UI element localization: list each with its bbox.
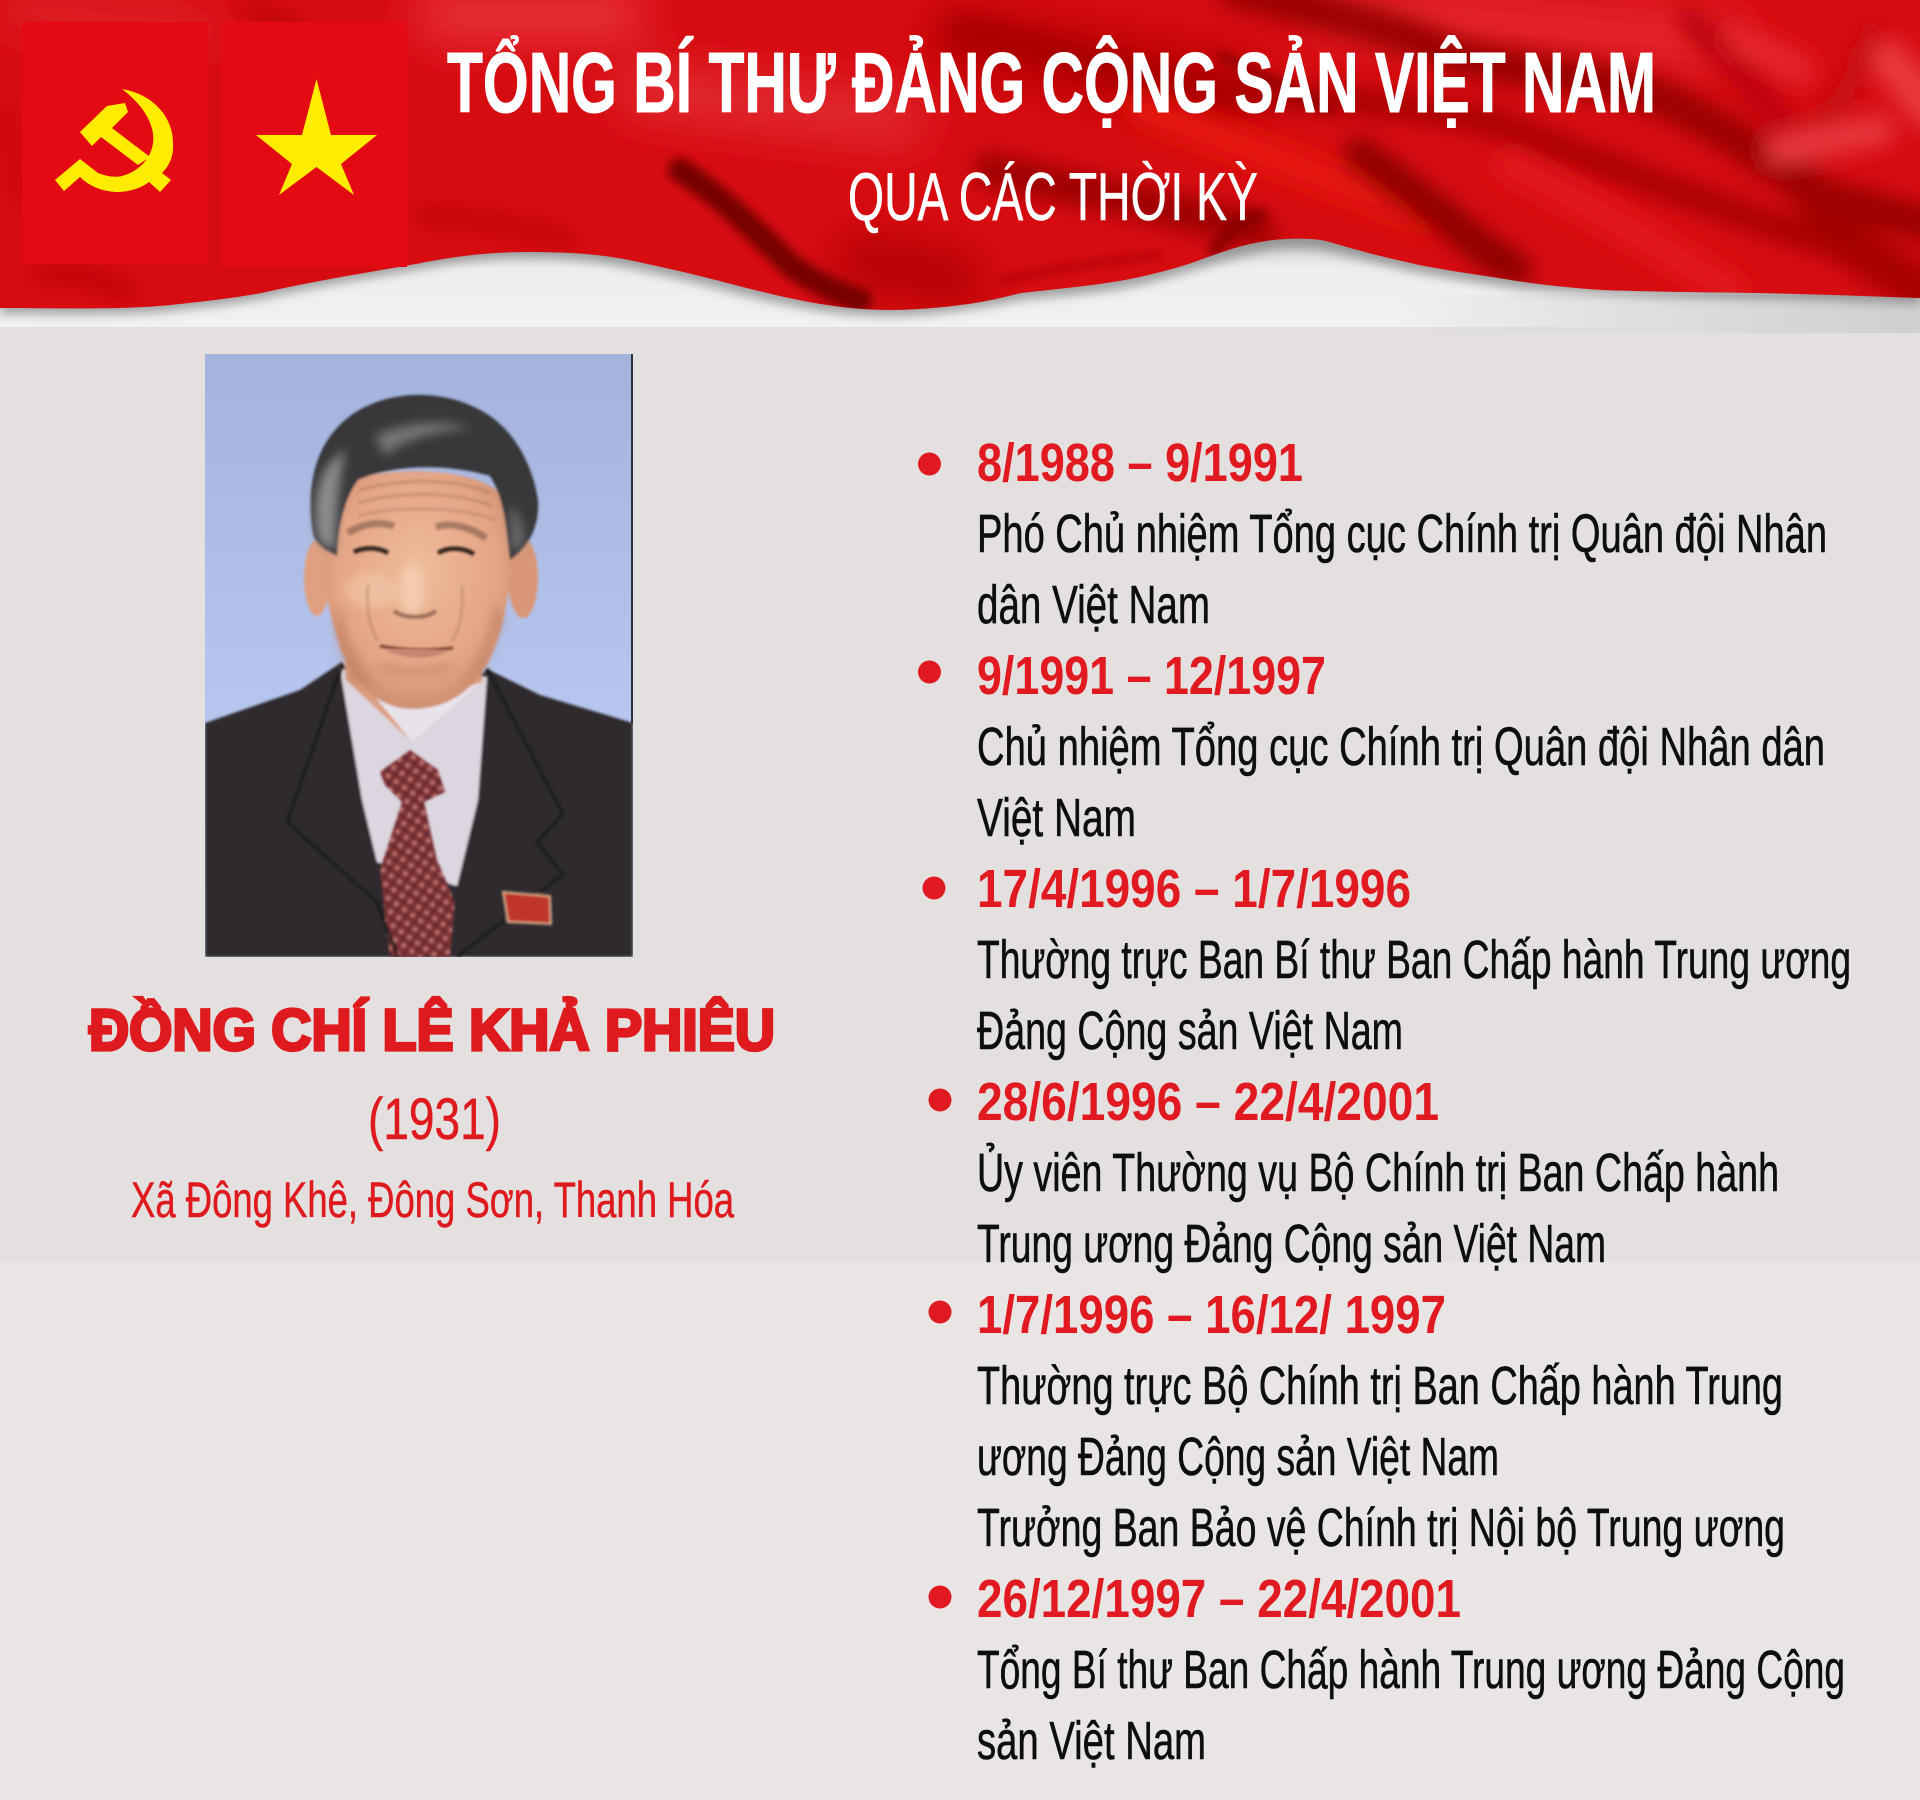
- neck: [344, 661, 484, 740]
- entry 6: 26/12/1997 – 22/4/2001: [977, 1569, 1461, 1629]
- entry 1: dân Việt Nam: [977, 575, 1210, 635]
- entry 5: [928, 1285, 1785, 1558]
- hair: [311, 395, 538, 560]
- suit: [205, 662, 633, 957]
- entry 4: [928, 1072, 1779, 1274]
- entry 3: [922, 859, 1851, 1061]
- tie: [380, 750, 455, 957]
- entry 2: 9/1991 – 12/1997: [977, 646, 1326, 706]
- entry 2: [918, 646, 1825, 848]
- entry 4: Trung ương Đảng Cộng sản Việt Nam: [977, 1214, 1606, 1274]
- facial features: [348, 481, 495, 650]
- birthplace: Xã Đông Khê, Đông Sơn, Thanh Hóa: [131, 1172, 734, 1228]
- hair grey streaks: [315, 423, 524, 552]
- icon: hammer and sickle: [55, 89, 173, 192]
- red waving flag banner: [0, 0, 1920, 316]
- entry 3: 17/4/1996 – 1/7/1996: [977, 859, 1411, 919]
- white band under the flag: [0, 230, 1920, 333]
- party flag panel: [22, 22, 208, 264]
- portrait photo: [205, 354, 634, 957]
- lapels: [287, 665, 563, 957]
- entry 4: 28/6/1996 – 22/4/2001: [977, 1072, 1439, 1132]
- shirt: [340, 669, 487, 886]
- face shading: [335, 564, 503, 690]
- entry 1: [918, 433, 1827, 635]
- entry 1: 8/1988 – 9/1991: [977, 433, 1303, 493]
- career timeline: [918, 433, 1851, 1771]
- name heading: ĐỒNG CHÍ LÊ KHẢ PHIÊU: [89, 998, 775, 1063]
- icon: yellow star: [256, 79, 377, 195]
- entry 2: Việt Nam: [977, 788, 1136, 848]
- entry 6: sản Việt Nam: [977, 1711, 1206, 1771]
- birth year: (1931): [368, 1087, 501, 1152]
- subtitle: QUA CÁC THỜI KỲ: [848, 159, 1258, 235]
- entry 5: ương Đảng Cộng sản Việt Nam: [977, 1427, 1499, 1487]
- entry 6: [928, 1569, 1845, 1771]
- entry 3: Đảng Cộng sản Việt Nam: [977, 1001, 1403, 1061]
- pin badge: [503, 892, 551, 924]
- national flag panel: [221, 22, 407, 267]
- ears: [304, 540, 330, 616]
- entry 5: 1/7/1996 – 16/12/ 1997: [977, 1285, 1446, 1345]
- face: [323, 471, 512, 709]
